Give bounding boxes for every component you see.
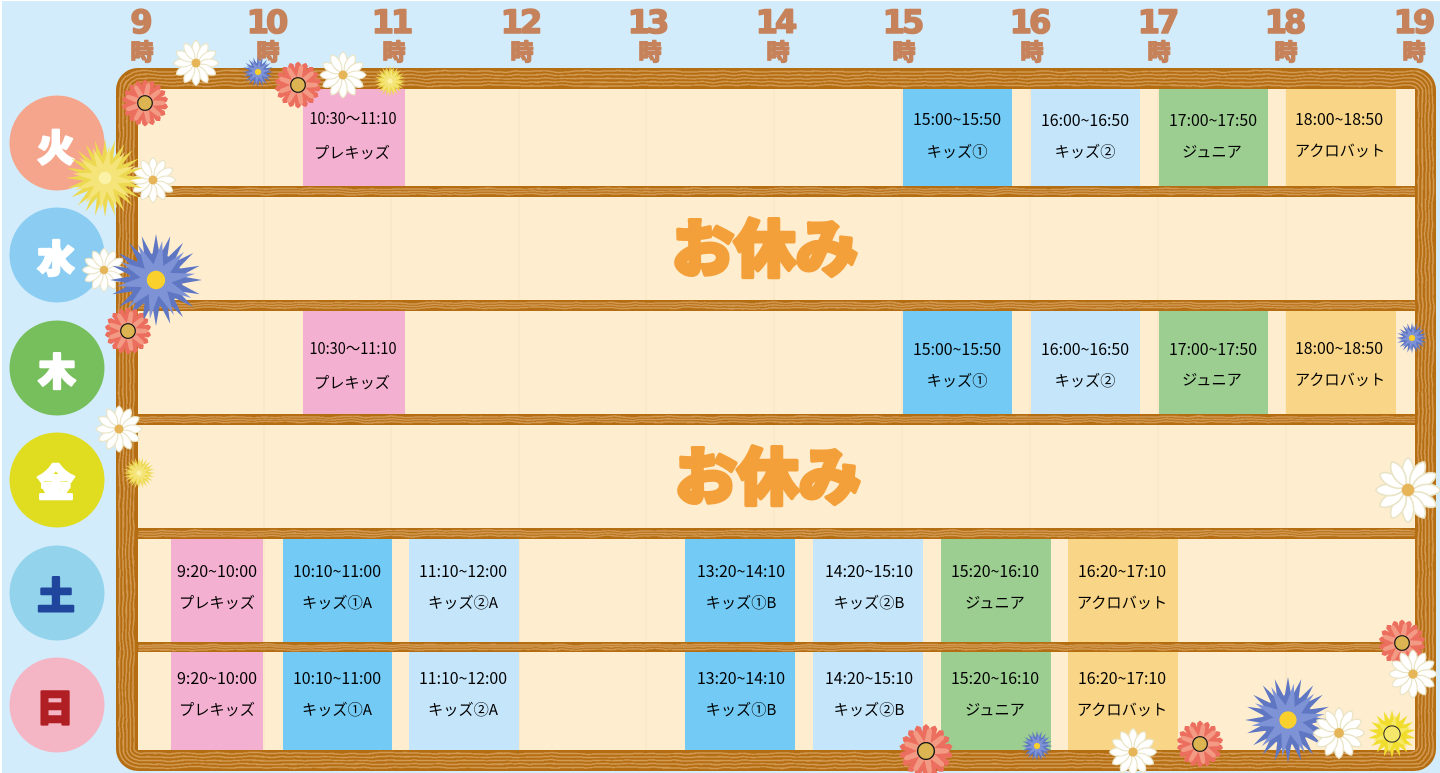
hour labels: 18 bbox=[1265, 3, 1305, 41]
day badge: Wednesday bbox=[10, 208, 104, 302]
hour labels: 時 bbox=[1402, 33, 1426, 67]
row: Tuesday classes: キッズ② bbox=[1055, 140, 1115, 162]
icon: white daisy bbox=[1389, 650, 1437, 698]
row: Wednesday closed: お休み bbox=[672, 199, 858, 289]
row: Saturday classes: キッズ②A bbox=[428, 591, 499, 613]
row: Saturday classes: アクロバット bbox=[1077, 591, 1167, 613]
icon: large yellow flower bbox=[66, 139, 144, 217]
row: Tuesday classes: 17:00~17:50 bbox=[1169, 107, 1257, 131]
day badge: Wednesday: 水 bbox=[38, 229, 74, 283]
hour labels: 12 bbox=[501, 3, 540, 41]
icon: small blue aster bbox=[1021, 730, 1053, 762]
row: Friday closed: お休み bbox=[675, 427, 861, 517]
row: Tuesday classes: 18:00~18:50 bbox=[1295, 106, 1383, 130]
day badge: Friday: 金 bbox=[38, 453, 74, 507]
icon: coral gerbera bbox=[1176, 720, 1224, 768]
row: Thursday classes: アクロバット bbox=[1295, 368, 1385, 390]
icon: white daisy bbox=[82, 248, 126, 292]
row: Sunday classes: 11:10~12:00 bbox=[419, 665, 507, 689]
icon: coral gerbera bbox=[104, 308, 152, 354]
row: Saturday classes bbox=[171, 539, 1178, 642]
icon: large blue aster bbox=[1245, 677, 1331, 763]
day badge: Thursday bbox=[10, 320, 104, 416]
hour labels: 時 bbox=[766, 33, 790, 67]
hour labels: 時 bbox=[1020, 33, 1044, 67]
day badge: Tuesday bbox=[10, 96, 104, 190]
row: Thursday classes: キッズ① bbox=[927, 369, 987, 391]
row: Sunday classes: 14:20~15:10 bbox=[825, 665, 913, 689]
day badge: Sunday: 日 bbox=[36, 678, 74, 732]
icon: white daisy bbox=[320, 52, 366, 98]
icon: white daisy bbox=[1314, 708, 1364, 758]
row: Saturday classes: ジュニア bbox=[965, 591, 1025, 613]
hour labels: 時 bbox=[130, 33, 154, 67]
row: Saturday classes: 15:20~16:10 bbox=[951, 558, 1039, 582]
row: Thursday classes: 17:00~17:50 bbox=[1169, 336, 1257, 360]
hour labels: 9 bbox=[130, 3, 151, 41]
day badge: Sunday bbox=[10, 658, 104, 752]
row: Saturday classes: 13:20~14:10 bbox=[697, 558, 785, 582]
row: Sunday classes: 10:10~11:00 bbox=[293, 665, 381, 689]
row: Sunday classes: プレキッズ bbox=[179, 698, 255, 720]
icon: large blue aster bbox=[110, 234, 202, 326]
icon: white daisy bbox=[96, 406, 142, 452]
row: Sunday classes: キッズ①B bbox=[706, 698, 776, 720]
icon: small yellow flower bbox=[374, 65, 406, 97]
row: Sunday classes bbox=[171, 652, 1178, 750]
row: Tuesday classes: 15:00~15:50 bbox=[913, 106, 1001, 130]
icon: yellow gerbera bbox=[1368, 710, 1416, 758]
hour labels: 時 bbox=[638, 33, 662, 67]
hour labels: 時 bbox=[510, 33, 534, 67]
row: Sunday classes: 13:20~14:10 bbox=[697, 665, 785, 689]
hour labels: 15 bbox=[883, 3, 923, 41]
icon: coral gerbera bbox=[1378, 620, 1426, 666]
hour labels: 17 bbox=[1138, 3, 1177, 41]
icon: small yellow flower bbox=[123, 457, 155, 489]
icon: white daisy bbox=[1376, 458, 1440, 522]
icon: small blue aster bbox=[242, 56, 274, 88]
day badge: Saturday: 土 bbox=[38, 566, 74, 620]
row: Thursday classes: ジュニア bbox=[1182, 368, 1242, 390]
row: Thursday classes: 15:00~15:50 bbox=[913, 336, 1001, 360]
day badge: Friday bbox=[10, 432, 104, 528]
row: Sunday classes: 9:20~10:00 bbox=[177, 665, 257, 689]
row: Thursday classes: 18:00~18:50 bbox=[1295, 335, 1383, 359]
icon: white daisy bbox=[1109, 728, 1157, 773]
icon: small blue aster bbox=[1396, 322, 1428, 354]
hour labels: 時 bbox=[256, 33, 280, 67]
row: Saturday classes: キッズ②B bbox=[834, 591, 904, 613]
hour labels: 時 bbox=[892, 33, 916, 67]
icon: coral gerbera bbox=[274, 62, 322, 108]
row: Thursday classes: 10:30〜11:10 bbox=[310, 335, 397, 359]
hour grid lines bbox=[264, 89, 1286, 750]
row: Thursday classes: プレキッズ bbox=[314, 371, 390, 393]
icon: coral gerbera bbox=[899, 724, 953, 773]
hour labels: 時 bbox=[382, 33, 406, 67]
hour labels: 16 bbox=[1010, 3, 1050, 41]
row: Tuesday classes bbox=[303, 89, 1396, 186]
icon: white daisy bbox=[130, 157, 176, 203]
row: Tuesday classes: キッズ① bbox=[927, 140, 987, 162]
row: Saturday classes: 16:20~17:10 bbox=[1078, 558, 1166, 582]
row: Saturday classes: 11:10~12:00 bbox=[419, 558, 507, 582]
row: Sunday classes: ジュニア bbox=[965, 698, 1025, 720]
row: Saturday classes: 10:10~11:00 bbox=[293, 558, 381, 582]
row: Thursday classes: 16:00~16:50 bbox=[1041, 336, 1129, 360]
icon: coral gerbera bbox=[121, 80, 169, 126]
row: Tuesday classes: アクロバット bbox=[1295, 139, 1385, 161]
day badge: Tuesday: 火 bbox=[38, 118, 74, 172]
hour labels: 13 bbox=[628, 3, 667, 41]
row: Saturday classes: プレキッズ bbox=[179, 591, 255, 613]
hour labels: 10 bbox=[247, 3, 287, 41]
row: Tuesday classes: 10:30〜11:10 bbox=[310, 105, 397, 129]
row: Saturday classes: キッズ①B bbox=[706, 591, 776, 613]
row: Sunday classes: アクロバット bbox=[1077, 698, 1167, 720]
row: Sunday classes: 16:20~17:10 bbox=[1078, 665, 1166, 689]
hour labels: 14 bbox=[756, 3, 796, 41]
hour labels: 19 bbox=[1394, 3, 1434, 41]
row: Sunday classes: 15:20~16:10 bbox=[951, 665, 1039, 689]
hour labels: 11 bbox=[372, 3, 412, 41]
hour labels bbox=[130, 3, 1434, 67]
row: Saturday classes: 9:20~10:00 bbox=[177, 558, 257, 582]
day badge: Thursday: 木 bbox=[38, 342, 76, 396]
row: Saturday classes: キッズ①A bbox=[302, 591, 373, 613]
row: Sunday classes: キッズ②A bbox=[428, 698, 499, 720]
board surface bbox=[130, 80, 1425, 760]
hour labels: 時 bbox=[1148, 33, 1170, 67]
row: Sunday classes: キッズ②B bbox=[834, 698, 904, 720]
row: Tuesday classes: プレキッズ bbox=[314, 141, 390, 163]
row: Saturday classes: 14:20~15:10 bbox=[825, 558, 913, 582]
row: Tuesday classes: ジュニア bbox=[1182, 140, 1242, 162]
row: Thursday classes bbox=[303, 311, 1396, 414]
row: Tuesday classes: 16:00~16:50 bbox=[1041, 107, 1129, 131]
row: Sunday classes: キッズ①A bbox=[302, 698, 373, 720]
hour labels: 時 bbox=[1274, 33, 1298, 67]
row: Thursday classes: キッズ② bbox=[1055, 369, 1115, 391]
icon: white daisy bbox=[173, 40, 219, 86]
day badge: Saturday bbox=[10, 546, 104, 640]
